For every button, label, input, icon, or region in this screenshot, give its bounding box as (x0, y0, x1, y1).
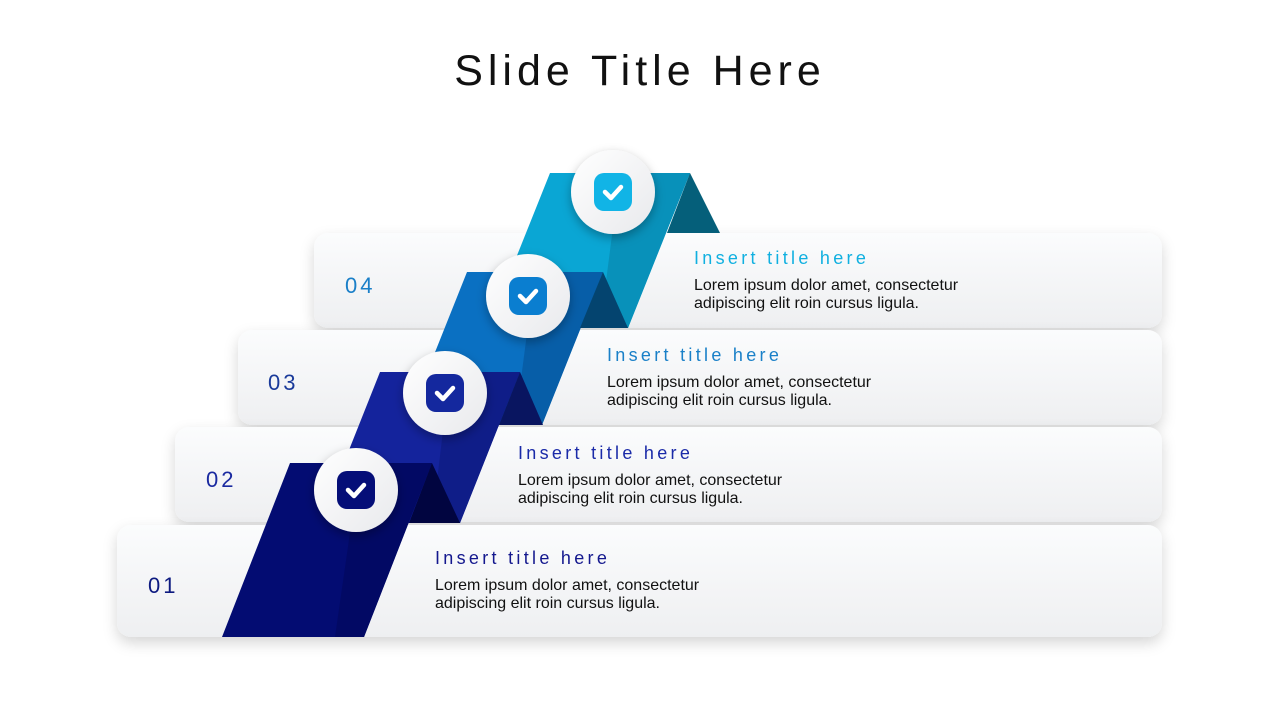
card 03 (238, 330, 1162, 425)
text 02: Insert title here (518, 443, 693, 463)
card 01: 01 (148, 573, 178, 598)
text 03 (607, 345, 872, 409)
text 04: Lorem ipsum dolor amet, consectetur (694, 277, 959, 294)
text 02: Lorem ipsum dolor amet, consectetur (518, 472, 783, 489)
text 01: adipiscing elit roin cursus ligula. (435, 595, 660, 612)
text 02 (518, 443, 783, 507)
text 03: adipiscing elit roin cursus ligula. (607, 392, 832, 409)
ribbon segment 04 (488, 173, 720, 328)
step 01 icon (314, 448, 398, 532)
step 02 icon (403, 351, 487, 435)
ribbon segment 01 (222, 463, 460, 637)
card 02 (175, 427, 1162, 522)
ribbon segment 03 (406, 272, 628, 425)
step 04 icon (571, 150, 655, 234)
text 01: Insert title here (435, 548, 610, 568)
title: Slide Title Here (454, 47, 826, 95)
ribbon segment 02 (320, 372, 543, 523)
text 03: Lorem ipsum dolor amet, consectetur (607, 374, 872, 391)
text 01: Lorem ipsum dolor amet, consectetur (435, 577, 700, 594)
text 04: Insert title here (694, 248, 869, 268)
step 03 icon (486, 254, 570, 338)
text 03: Insert title here (607, 345, 782, 365)
card 04 (314, 233, 1162, 328)
card 02: 02 (206, 467, 236, 492)
text 04: adipiscing elit roin cursus ligula. (694, 295, 919, 312)
card 01 (117, 525, 1162, 637)
card 03: 03 (268, 370, 298, 395)
text 04 (694, 248, 959, 312)
text 02: adipiscing elit roin cursus ligula. (518, 490, 743, 507)
text 01 (435, 548, 700, 612)
card 04: 04 (345, 273, 375, 298)
